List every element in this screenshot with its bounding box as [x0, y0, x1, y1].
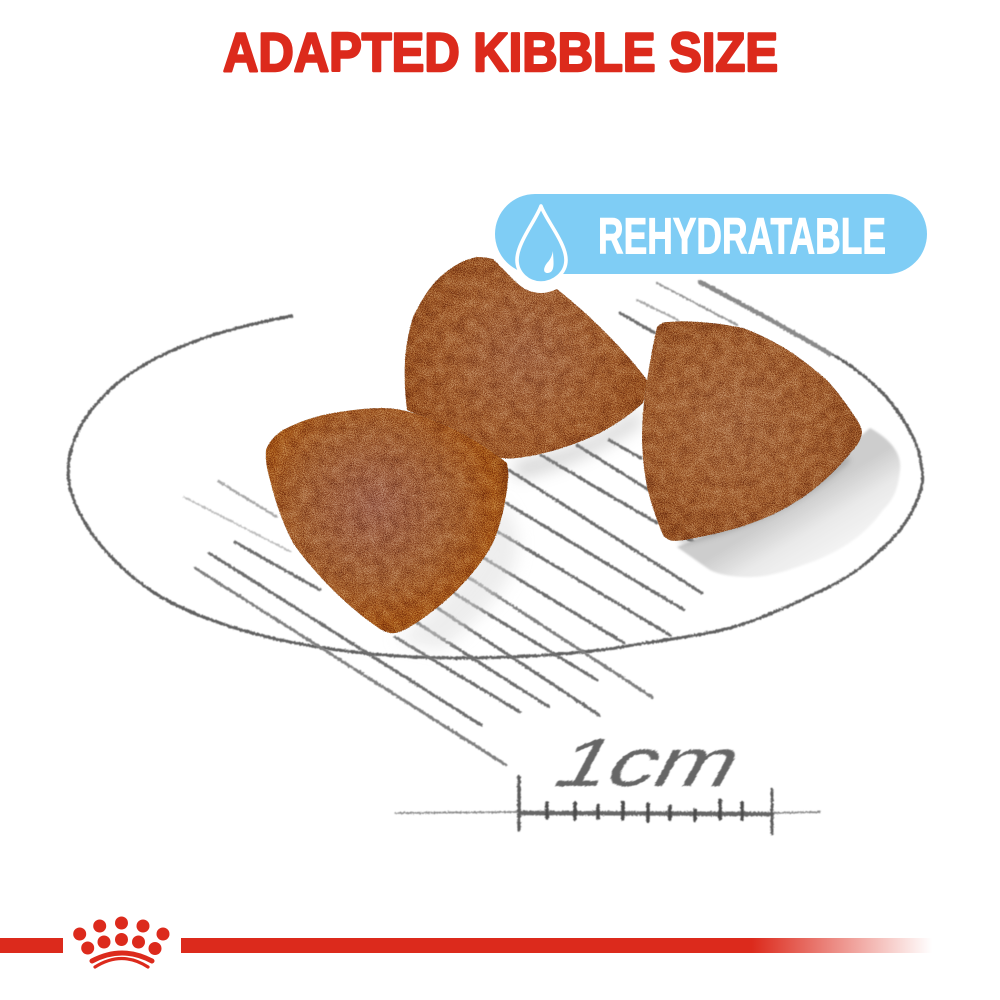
plate sketch [68, 282, 923, 658]
footer bar left [0, 938, 63, 953]
kibble: right [642, 321, 862, 541]
badge halo [510, 231, 572, 293]
title: ADAPTED KIBBLE SIZE [223, 21, 778, 83]
badge: rehydratable [495, 194, 927, 293]
icon: crown logo [73, 916, 170, 967]
footer bar right [181, 938, 932, 953]
scale ruler sketch [395, 777, 820, 834]
kibble shadows [395, 408, 900, 650]
scale label: 1cm: 1cm [540, 725, 758, 801]
badge pill [495, 194, 927, 274]
icon: water drop [517, 206, 566, 283]
kibble: middle [405, 257, 647, 459]
plate hatching [184, 283, 737, 765]
kibble: left [266, 408, 508, 633]
